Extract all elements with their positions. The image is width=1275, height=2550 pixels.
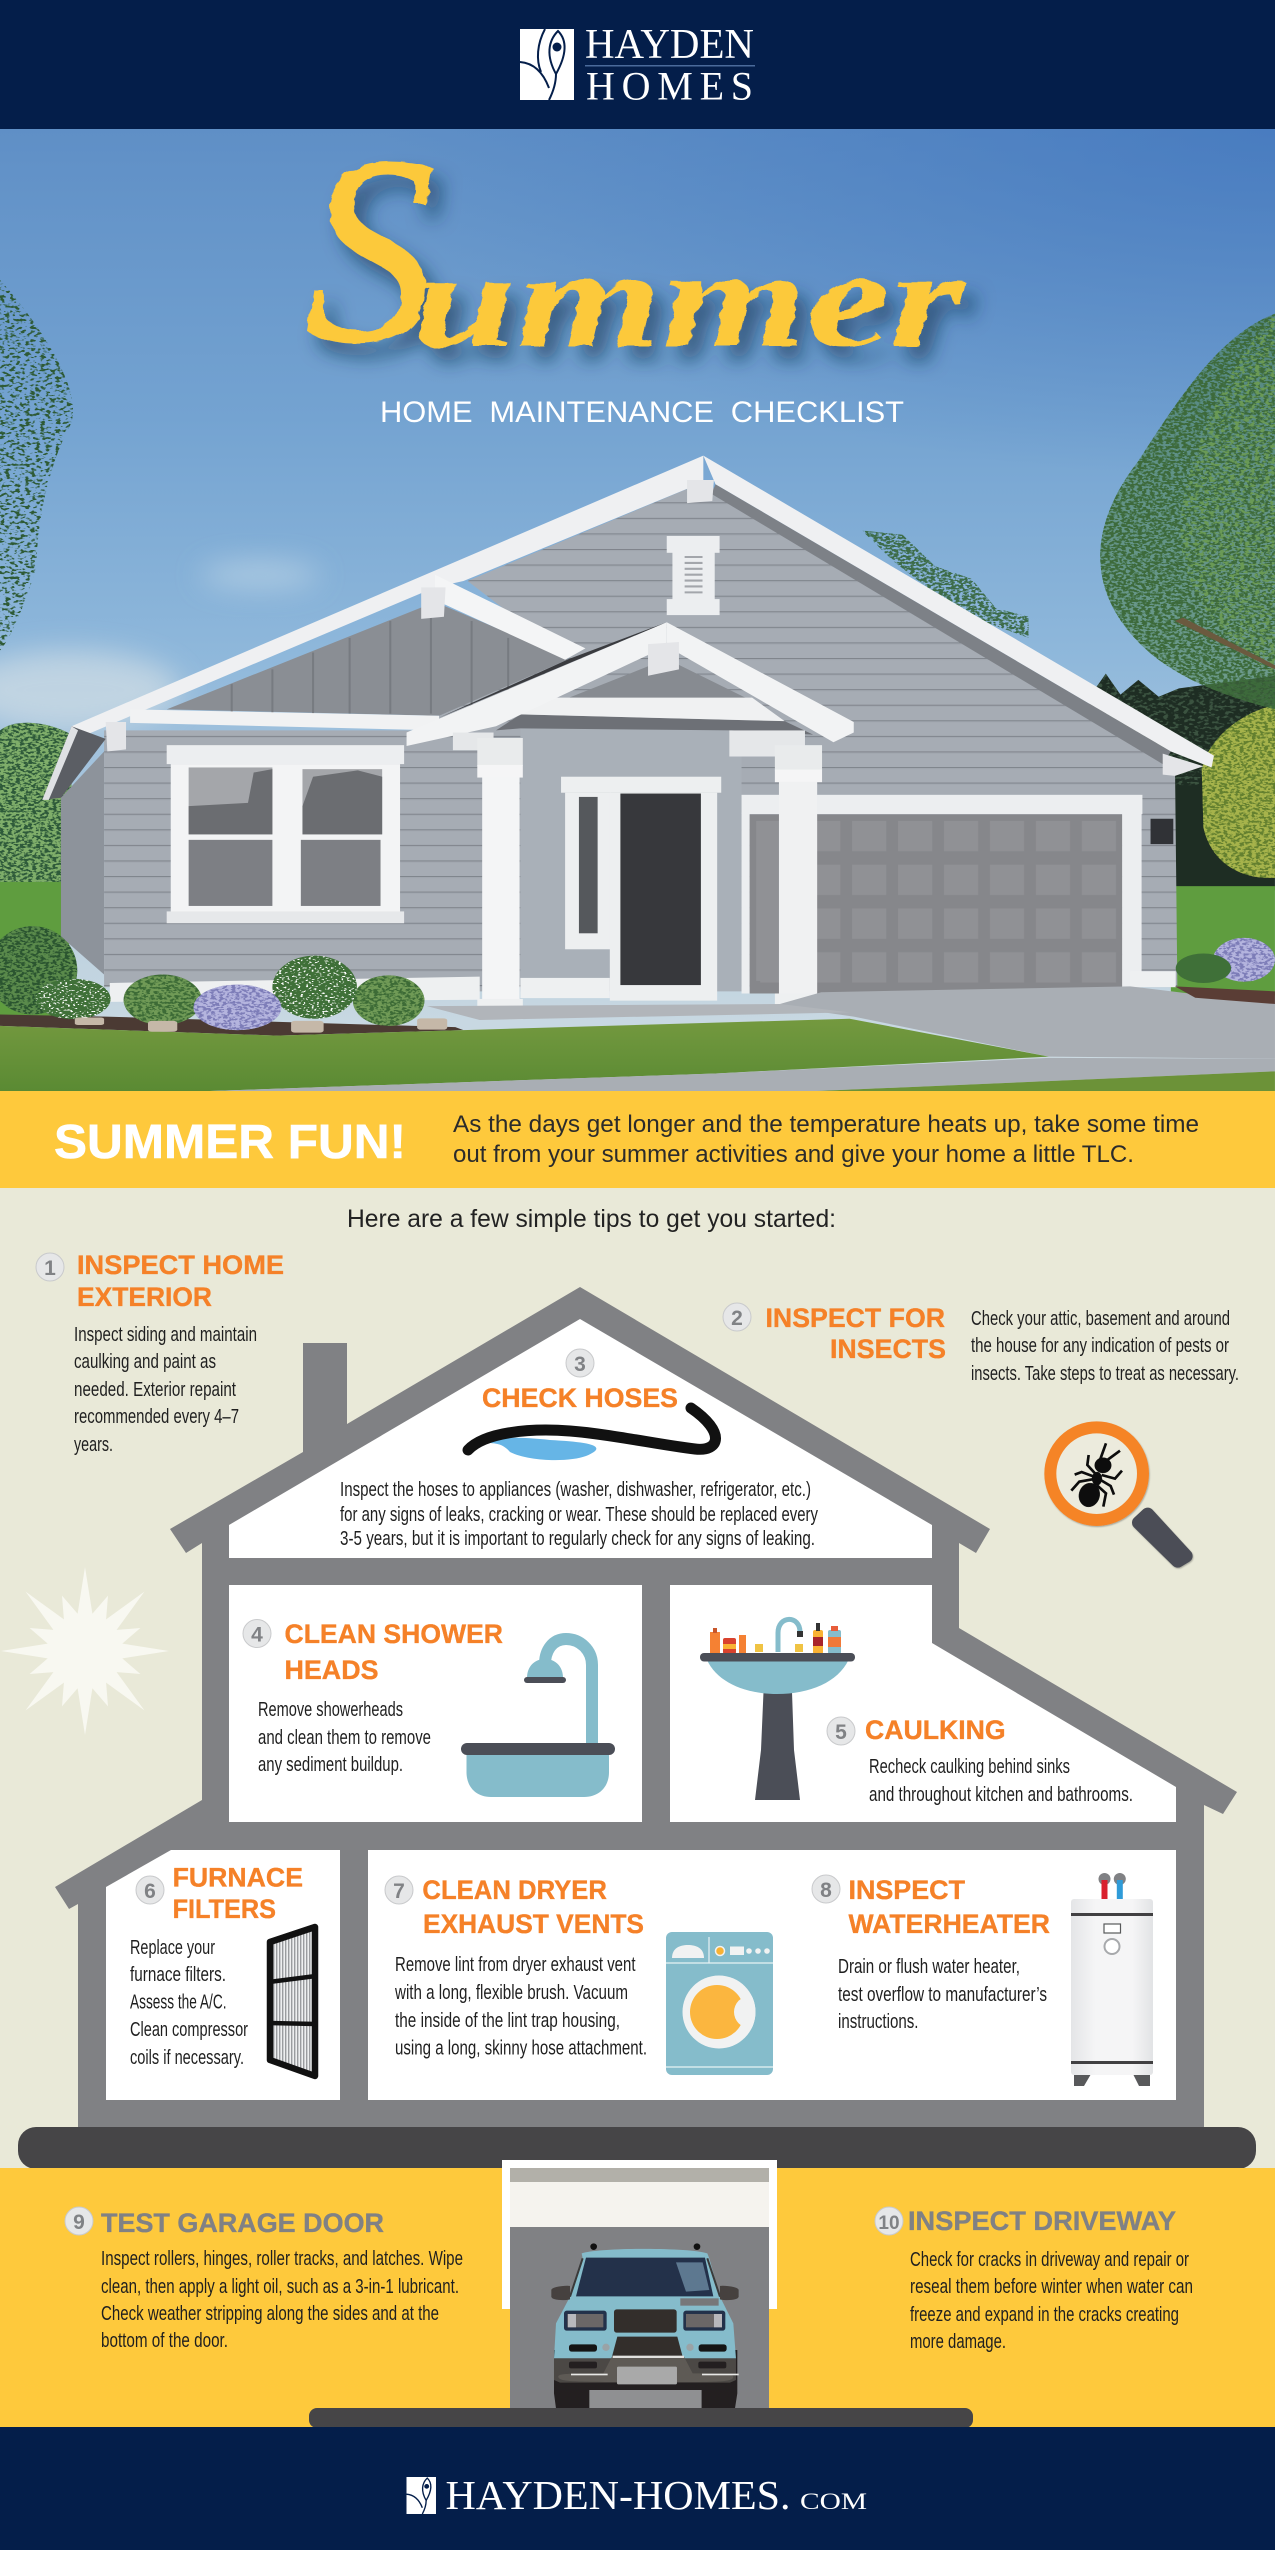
footer url: COM <box>800 2489 867 2514</box>
text 9: Inspect rollers, hinges, roller tracks, and latches. Wipe <box>101 2247 463 2270</box>
text 9: clean, then apply a light oil, such as a 3-in-1 lubricant. <box>101 2275 459 2298</box>
logo wordmark: HOMES <box>586 64 753 108</box>
heading 8 <box>848 1875 1050 1939</box>
sky <box>0 129 1275 1091</box>
text 3: Inspect the hoses to appliances (washer, dishwasher, refrigerator, etc.) <box>340 1478 811 1501</box>
footer bar <box>0 2427 1275 2550</box>
title: Summer: S <box>305 101 435 398</box>
text 1 <box>74 1323 257 1456</box>
footer url: HAYDEN-HOMES. <box>446 2472 790 2518</box>
heading 6: FILTERS <box>173 1894 276 1924</box>
heading 8: WATERHEATER <box>848 1909 1050 1939</box>
badge 9 <box>65 2207 93 2235</box>
icon: hose and puddle <box>468 1408 716 1460</box>
garden rocks <box>75 1017 447 1033</box>
heading 2: INSPECT FOR <box>766 1303 945 1333</box>
band intro text <box>453 1111 1199 1168</box>
item 3: check hoses <box>340 1349 819 1550</box>
summer fun band <box>0 1091 1275 1188</box>
heading 6 <box>173 1862 303 1924</box>
text 1: Inspect siding and maintain <box>74 1323 257 1346</box>
header logo <box>520 22 755 108</box>
illustrated house drawing <box>0 280 1275 1092</box>
text 7: using a long, skinny hose attachment. <box>395 2036 647 2060</box>
front lawn <box>0 1019 1049 1092</box>
item 10: inspect driveway <box>875 2206 1193 2353</box>
item 7: clean dryer exhaust vents <box>385 1875 773 2075</box>
garage interior <box>510 2227 769 2408</box>
text 8: instructions. <box>838 2010 918 2033</box>
roof fascia <box>42 456 1214 800</box>
text 8: Drain or flush water heater, <box>838 1955 1020 1978</box>
heading 7: EXHAUST VENTS <box>423 1909 644 1939</box>
sink room <box>670 1585 1176 1822</box>
text 8: test overflow to manufacturer’s <box>838 1983 1047 2006</box>
front door <box>561 777 721 1001</box>
item 2: inspect for insects <box>723 1303 1239 1561</box>
text 6: Clean compressor <box>130 2018 248 2041</box>
porch columns <box>477 738 822 1019</box>
item 5: caulking <box>700 1619 1133 1806</box>
wall lantern <box>1151 819 1173 844</box>
badge 8 <box>812 1875 840 1903</box>
heading 9: TEST GARAGE DOOR <box>101 2208 384 2238</box>
bottom yellow band <box>0 2168 1275 2427</box>
icon: shower and tub <box>461 1639 615 1797</box>
text 3 <box>340 1478 819 1550</box>
header bar <box>0 0 1275 129</box>
item 4: clean shower heads <box>243 1619 615 1797</box>
text 6 <box>130 1936 248 2069</box>
text 1: needed. Exterior repaint <box>74 1378 236 1401</box>
text 4: any sediment buildup. <box>258 1753 403 1776</box>
logo icon <box>520 29 574 100</box>
title: Summer <box>305 101 965 398</box>
garage opening <box>309 2160 973 2428</box>
garage <box>742 795 1142 993</box>
text 1: years. <box>74 1433 113 1456</box>
text 5 <box>869 1755 1133 1806</box>
shrubs <box>0 926 1275 1030</box>
left gable <box>167 602 569 716</box>
heading 1 <box>77 1250 284 1312</box>
icon: filter <box>269 1927 316 2076</box>
item 8: inspect water heater <box>812 1873 1153 2086</box>
heading 7 <box>422 1875 644 1939</box>
text 10: more damage. <box>910 2330 1006 2353</box>
sun icon <box>1 1567 169 1735</box>
badge 8: 8 <box>820 1879 832 1902</box>
attic room <box>229 1319 932 1558</box>
utility room <box>368 1850 1176 2100</box>
ant <box>1071 1443 1122 1509</box>
heading 4: HEADS <box>284 1655 378 1685</box>
trim right <box>1130 971 1176 987</box>
band heading: SUMMER FUN! <box>54 1116 406 1169</box>
driveway slab <box>309 2408 973 2428</box>
text 5: and throughout kitchen and bathrooms. <box>869 1783 1133 1806</box>
icon: dryer <box>666 1932 773 2075</box>
heading 1: EXTERIOR <box>77 1282 212 1312</box>
icon: water heater <box>1071 1873 1153 2086</box>
front window <box>167 745 404 923</box>
text 8 <box>838 1955 1047 2033</box>
heading 1: INSPECT HOME <box>77 1250 284 1280</box>
heading 10: INSPECT DRIVEWAY <box>908 2206 1176 2236</box>
text 7 <box>394 1953 647 2060</box>
text 7: with a long, flexible brush. Vacuum <box>394 1981 628 2004</box>
text 5: Recheck caulking behind sinks <box>869 1755 1070 1778</box>
heading 4 <box>284 1619 503 1685</box>
item 9: test garage door <box>65 2207 463 2352</box>
base trim left <box>110 977 480 1002</box>
badge 3: 3 <box>574 1353 586 1376</box>
side wall <box>61 751 104 975</box>
badge 2 <box>723 1303 751 1331</box>
heading 8: INSPECT <box>848 1875 965 1905</box>
badge 4 <box>243 1620 271 1648</box>
badge 9: 9 <box>73 2211 85 2234</box>
badge 10 <box>875 2207 903 2235</box>
background trees <box>0 674 1275 1021</box>
badge 7 <box>385 1876 413 1904</box>
text 9 <box>101 2247 463 2352</box>
car <box>551 2243 739 2408</box>
lawn back <box>0 882 69 1021</box>
badge 6 <box>136 1876 164 1904</box>
hero photo: sky and house <box>0 129 1275 1092</box>
house cross-section <box>18 1287 1256 2169</box>
heading 2: INSECTS <box>830 1334 946 1364</box>
mulch beds <box>0 986 1275 1036</box>
title: Summer: ummer <box>412 222 965 377</box>
main siding <box>104 482 1177 987</box>
heading 7: CLEAN DRYER <box>422 1875 607 1905</box>
heading 3: CHECK HOSES <box>482 1383 678 1413</box>
garage frame <box>502 2160 777 2309</box>
badge 1: 1 <box>44 1257 56 1280</box>
band intro text: As the days get longer and the temperature heats up, take some time <box>453 1111 1199 1138</box>
text 6: Replace your <box>130 1936 215 1959</box>
text 6: Assess the A/C. <box>130 1990 226 2014</box>
item 1: inspect home exterior <box>36 1250 284 1456</box>
heading 6: FURNACE <box>173 1862 303 1892</box>
text 4: and clean them to remove <box>258 1726 431 1749</box>
driveway and porch slab <box>427 986 1275 1059</box>
badge 6: 6 <box>144 1880 156 1903</box>
background: cream body <box>0 1187 1275 2169</box>
footer logo icon <box>406 2477 436 2514</box>
logo wordmark <box>585 22 755 108</box>
text 7: the inside of the lint trap housing, <box>395 2009 620 2032</box>
text 6: coils if necessary. <box>130 2046 244 2069</box>
window band <box>130 709 439 730</box>
item 6: furnace filters <box>130 1862 316 2076</box>
icon: magnifier and ant <box>1050 1427 1186 1561</box>
badge 10: 10 <box>878 2213 900 2234</box>
badge 5 <box>827 1717 855 1745</box>
logo wordmark: HAYDEN <box>585 22 754 68</box>
sidewalk <box>195 1058 1275 1092</box>
heading 2 <box>766 1303 946 1364</box>
badge 4: 4 <box>251 1624 263 1646</box>
subtitle: HOME MAINTENANCE CHECKLIST <box>380 396 904 429</box>
band intro text: out from your summer activities and give your home a little TLC. <box>453 1141 1134 1168</box>
foundation <box>18 2127 1256 2169</box>
text 10 <box>910 2248 1193 2353</box>
text 10: freeze and expand in the cracks creating <box>910 2303 1179 2326</box>
house walls and roof <box>55 1287 1237 2127</box>
text 2 <box>971 1307 1239 1385</box>
shower room <box>229 1585 642 1822</box>
text 4: Remove showerheads <box>258 1698 403 1721</box>
furnace room <box>106 1850 340 2100</box>
tree foliage <box>0 280 1275 709</box>
heading 5: CAULKING <box>865 1715 1006 1745</box>
porch wall <box>520 728 742 991</box>
garage door <box>510 2168 769 2227</box>
badge 5: 5 <box>835 1721 847 1744</box>
text 1: recommended every 4–7 <box>74 1405 239 1428</box>
badge 7: 7 <box>393 1880 405 1903</box>
badge 3 <box>566 1349 594 1377</box>
text 3: 3-5 years, but it is important to regularly check for any signs of leaking. <box>340 1527 815 1550</box>
text 6: furnace filters. <box>130 1963 226 1986</box>
badge 1 <box>36 1253 64 1281</box>
gable vent <box>667 536 720 615</box>
heading 4: CLEAN SHOWER <box>284 1619 503 1649</box>
icon: pedestal sink <box>700 1619 855 1800</box>
text 1: caulking and paint as <box>74 1350 216 1373</box>
text 7: Remove lint from dryer exhaust vent <box>395 1953 636 1976</box>
text 9: bottom of the door. <box>101 2329 228 2352</box>
intro line: Here are a few simple tips to get you started: <box>347 1205 836 1233</box>
text 3: for any signs of leaks, cracking or wear. These should be replaced every <box>340 1503 819 1526</box>
text 9: Check weather stripping along the sides and at the <box>101 2302 439 2325</box>
badge 2: 2 <box>731 1307 743 1330</box>
porch roof <box>407 622 854 757</box>
text 4 <box>258 1698 431 1776</box>
